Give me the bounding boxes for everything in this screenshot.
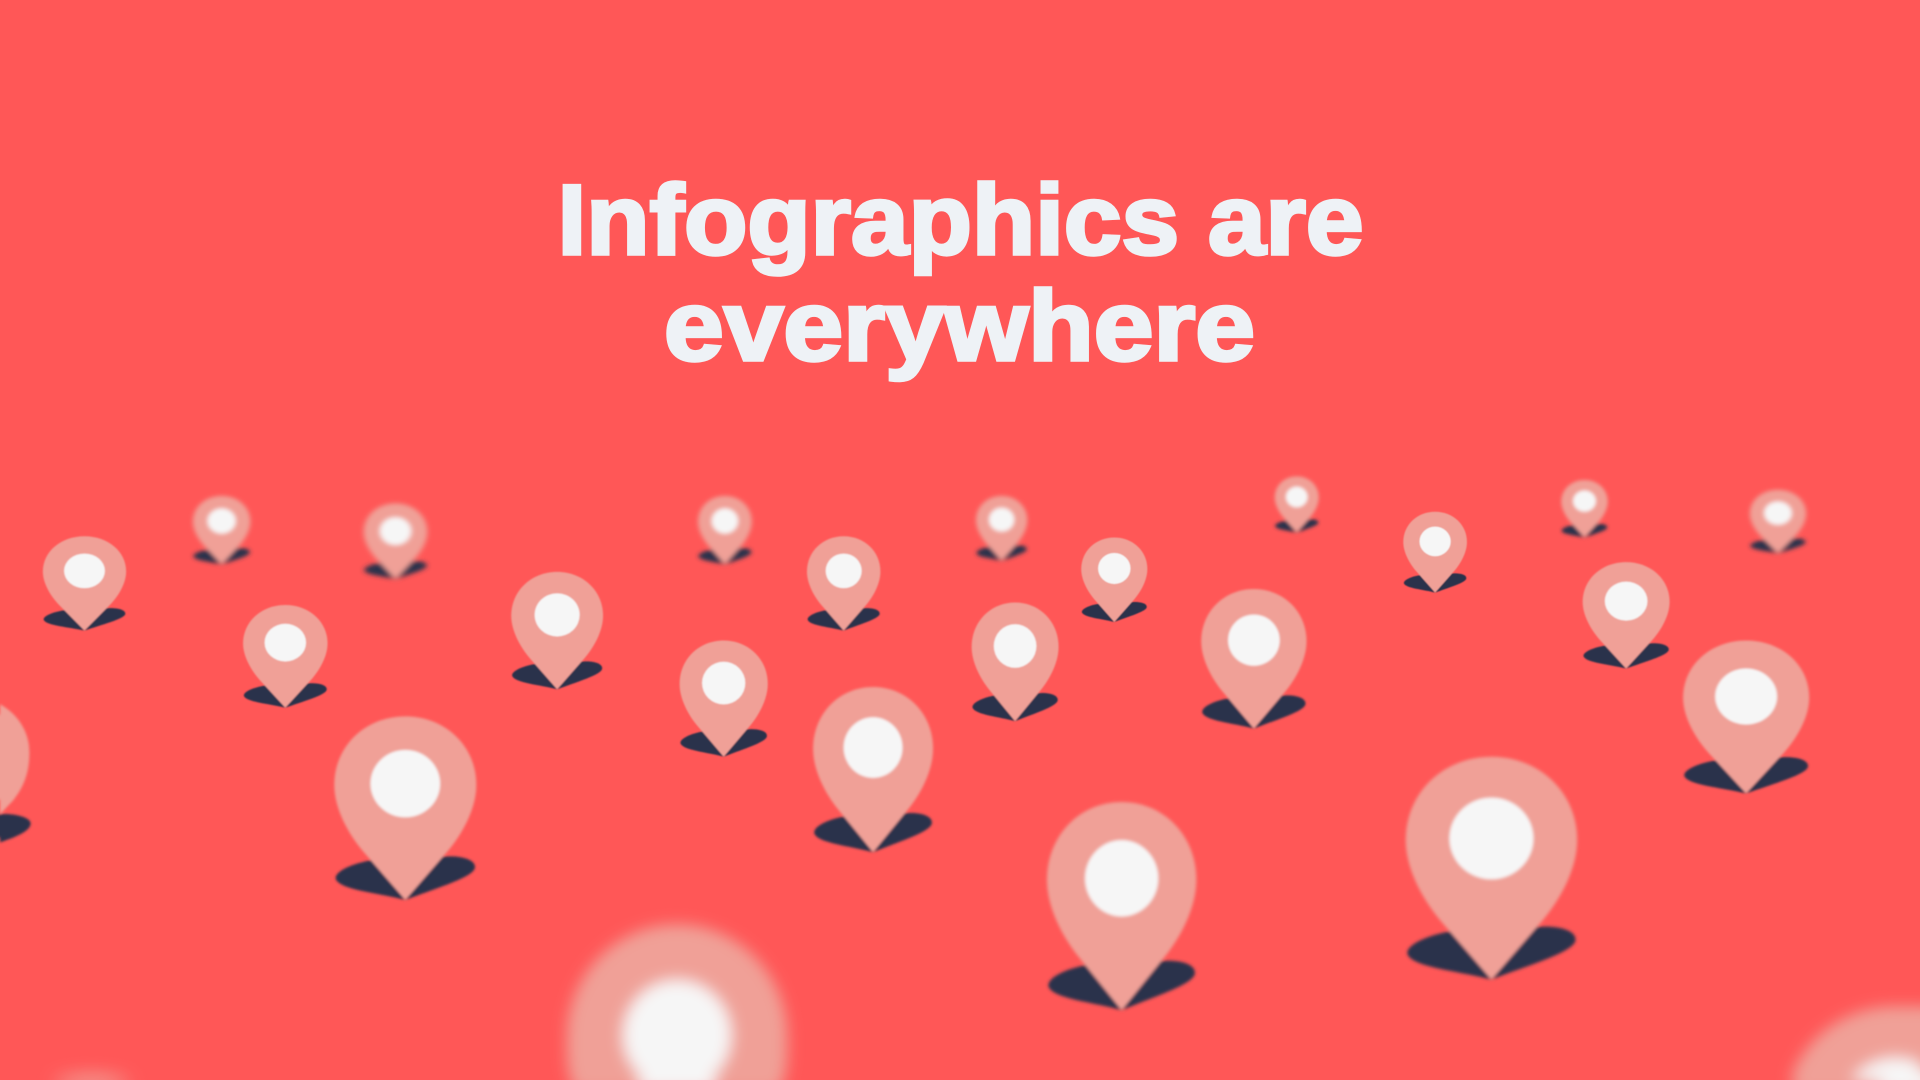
icon: map pin far 5 (1275, 476, 1319, 533)
icon: map pin far 4 (976, 496, 1027, 561)
icon: map pin 14 (680, 640, 768, 757)
icon: map pin near bottom left (49, 1073, 135, 1080)
icon: map pin far 7 (1750, 490, 1806, 553)
icon: map pin 15 (972, 603, 1059, 721)
title: everywhere (664, 270, 1255, 381)
icon: map pin far 6 (1561, 480, 1608, 538)
icon: map pin 11 (43, 536, 126, 631)
map pins field (0, 476, 1920, 1080)
icon: map pin 13 (511, 572, 603, 689)
icon: map pin 19 (813, 687, 933, 852)
icon: map pin 12 (243, 605, 328, 708)
icon: map pin left edge (0, 704, 31, 842)
icon: map pin 17 (1583, 562, 1670, 669)
icon: map pin far 1 (193, 496, 250, 564)
icon: map pin 18 (1683, 640, 1809, 793)
icon: map pin 10 (807, 536, 880, 631)
icon: map pin 16 (1201, 589, 1307, 729)
icon: map pin near bottom centre (567, 924, 787, 1080)
icon: map pin far 2 (364, 503, 427, 579)
icon: map pin near bottom right (1790, 1006, 1920, 1080)
title (558, 164, 1364, 381)
icon: map pin 8 (1403, 512, 1467, 593)
icon: map pin 22 (1406, 757, 1577, 980)
icon: map pin 9 (1081, 538, 1147, 622)
icon: map pin 21 (1047, 802, 1196, 1010)
icon: map pin far 3 (698, 496, 752, 564)
icon: map pin 20 (334, 716, 476, 900)
title: Infographics are (558, 164, 1364, 275)
